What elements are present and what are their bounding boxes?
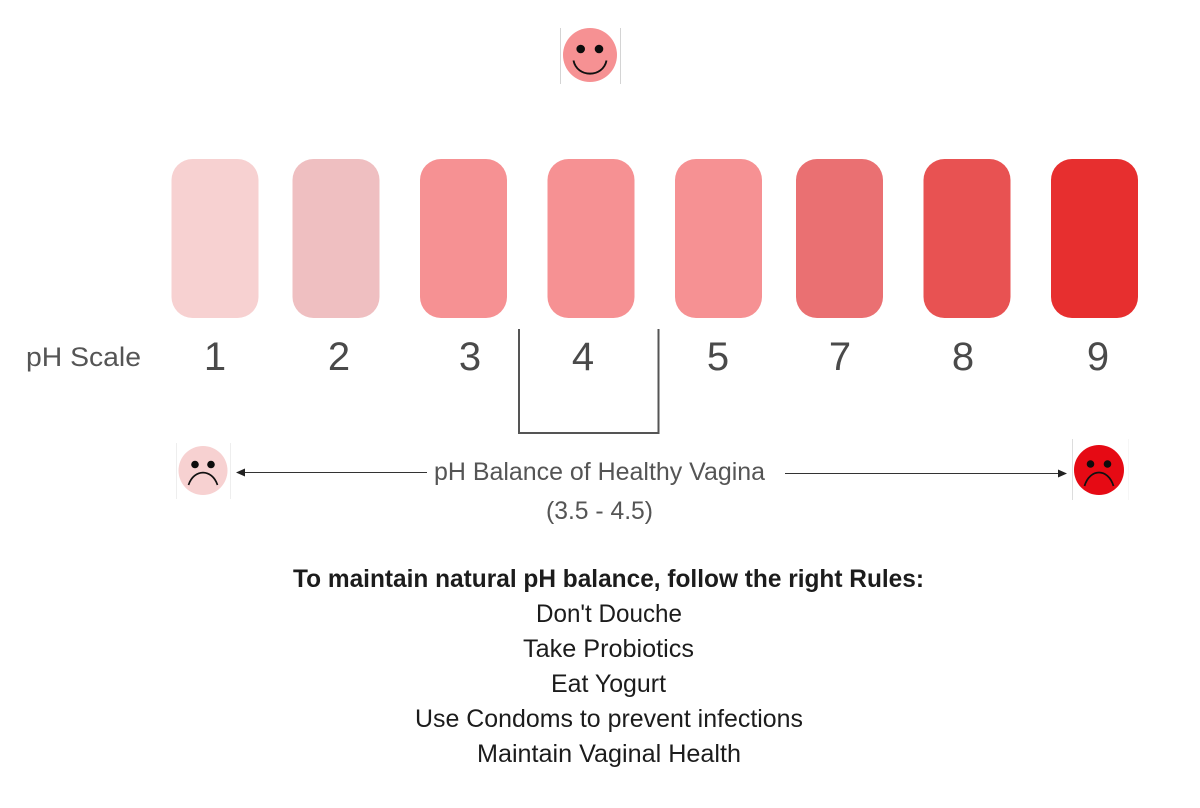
- pH scale numbers: 3: [459, 335, 481, 379]
- rules text block: Use Condoms to prevent infections: [415, 705, 803, 733]
- arrow: right: [785, 472, 1066, 474]
- swatch: pH 3: [420, 159, 507, 318]
- rules heading: To maintain natural pH balance, follow the right Rules:: [293, 565, 924, 593]
- pH scale numbers: [204, 335, 1109, 379]
- rules text block: Don't Douche: [536, 600, 682, 628]
- pH scale numbers: 1: [204, 335, 226, 379]
- swatch: pH 7: [796, 159, 883, 318]
- pH scale label: pH Scale: [26, 342, 141, 372]
- rules text block: Maintain Vaginal Health: [477, 740, 741, 768]
- icon: happy face: [560, 28, 620, 84]
- icon: red sad face: [1072, 439, 1128, 500]
- pH scale numbers: 8: [952, 335, 974, 379]
- icon: light sad face: [176, 443, 230, 499]
- healthy range caption: (3.5 - 4.5): [546, 497, 653, 525]
- swatch: pH 2: [292, 159, 380, 318]
- swatch: pH 5: [675, 159, 762, 318]
- pH scale numbers: 5: [707, 335, 729, 379]
- rules text block: Take Probiotics: [523, 635, 694, 663]
- pH scale numbers: 9: [1087, 335, 1109, 379]
- swatch: pH 4: [548, 159, 634, 318]
- pH scale numbers: 2: [328, 335, 350, 379]
- healthy range caption: [434, 458, 765, 525]
- rules text block: [293, 565, 924, 768]
- bracket around healthy range: [519, 329, 658, 433]
- healthy range caption: pH Balance of Healthy Vagina: [434, 458, 765, 486]
- swatch: pH 8: [924, 159, 1010, 318]
- pH scale numbers: 4: [572, 335, 594, 379]
- pH scale numbers: 7: [829, 335, 851, 379]
- swatch: pH 9: [1051, 159, 1138, 318]
- rules text block: Eat Yogurt: [551, 670, 666, 698]
- arrow: left: [237, 472, 427, 474]
- pH color swatches: [172, 159, 1138, 318]
- swatch: pH 1: [172, 159, 258, 318]
